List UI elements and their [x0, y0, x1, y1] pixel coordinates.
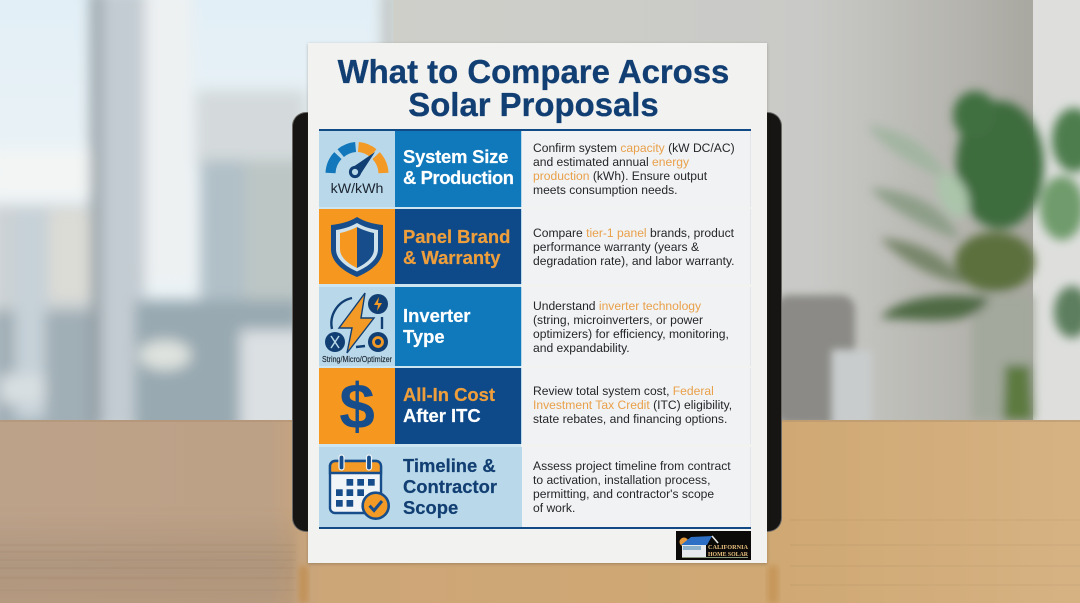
logo: California Home Solar: CALIFORNIA	[708, 544, 748, 551]
description: optimizers) for efficiency, monitoring,	[533, 327, 729, 341]
heading: After ITC	[403, 405, 481, 426]
wooden table	[0, 420, 1080, 603]
title	[338, 53, 729, 124]
heading: Contractor	[403, 476, 497, 497]
description: Assess project timeline from contract	[533, 459, 731, 473]
description: Compare tier-1 panel brands, product	[533, 226, 734, 240]
heading: & Warranty	[403, 247, 500, 268]
row 2: panel brand	[319, 209, 751, 284]
heading: Panel Brand	[403, 226, 510, 247]
description	[521, 209, 751, 284]
description	[521, 287, 751, 366]
top rule	[319, 129, 751, 131]
description: and expandability.	[533, 341, 630, 355]
description: to activation, installation process,	[533, 473, 710, 487]
description: performance warranty (years &	[533, 240, 699, 254]
description: Review total system cost, Federal	[533, 384, 714, 398]
icon: inverter bolt	[319, 287, 395, 366]
description: Understand inverter technology	[533, 299, 701, 313]
description: of work.	[533, 501, 575, 515]
window scene	[0, 0, 400, 435]
bottom rule	[319, 527, 751, 529]
row 4: cost	[319, 368, 751, 444]
description	[521, 131, 751, 207]
row 3: inverter	[319, 287, 751, 366]
proposal card	[308, 43, 767, 563]
heading: Type	[403, 326, 445, 347]
row 1: system size	[319, 131, 751, 207]
icon: shield	[319, 209, 395, 284]
title: What to Compare Across	[338, 53, 729, 90]
blurred chair	[775, 295, 872, 425]
heading	[395, 131, 521, 207]
logo: California Home Solar	[676, 531, 751, 560]
logo: California Home Solar: HOME SOLAR	[708, 551, 748, 558]
column tint behind rows	[319, 131, 521, 527]
description: degradation rate), and labor warranty.	[533, 254, 734, 268]
heading	[395, 209, 521, 284]
description: permitting, and contractor's scope	[533, 487, 714, 501]
heading: System Size	[403, 146, 508, 167]
icon: dollar	[319, 368, 395, 444]
description: Confirm system capacity (kW DC/AC)	[533, 141, 735, 155]
title: Solar Proposals	[408, 86, 659, 122]
description: state rebates, and financing options.	[533, 412, 727, 426]
description: (string, microinverters, or power	[533, 313, 703, 327]
icon: gauge: kW/kWh	[331, 181, 383, 197]
wall	[393, 0, 1080, 420]
heading: Timeline &	[403, 455, 496, 476]
heading: Inverter	[403, 305, 470, 326]
icon: calendar	[319, 447, 395, 527]
description	[521, 368, 751, 444]
heading	[395, 368, 521, 444]
description: and estimated annual energy	[533, 155, 689, 169]
icon: dollar: $	[339, 370, 375, 442]
heading: All-In Cost	[403, 384, 495, 405]
description: production (kWh). Ensure output	[533, 169, 707, 183]
blurred plant	[867, 91, 1080, 420]
heading: & Production	[403, 167, 514, 188]
description: Investment Tax Credit (ITC) eligibility,	[533, 398, 732, 412]
heading	[395, 287, 521, 366]
description	[521, 447, 751, 527]
heading: Scope	[403, 497, 458, 518]
row 5: timeline	[319, 447, 751, 527]
description: meets consumption needs.	[533, 183, 678, 197]
dark tablet behind card	[293, 113, 781, 531]
icon: gauge	[319, 131, 395, 207]
heading	[395, 447, 521, 527]
